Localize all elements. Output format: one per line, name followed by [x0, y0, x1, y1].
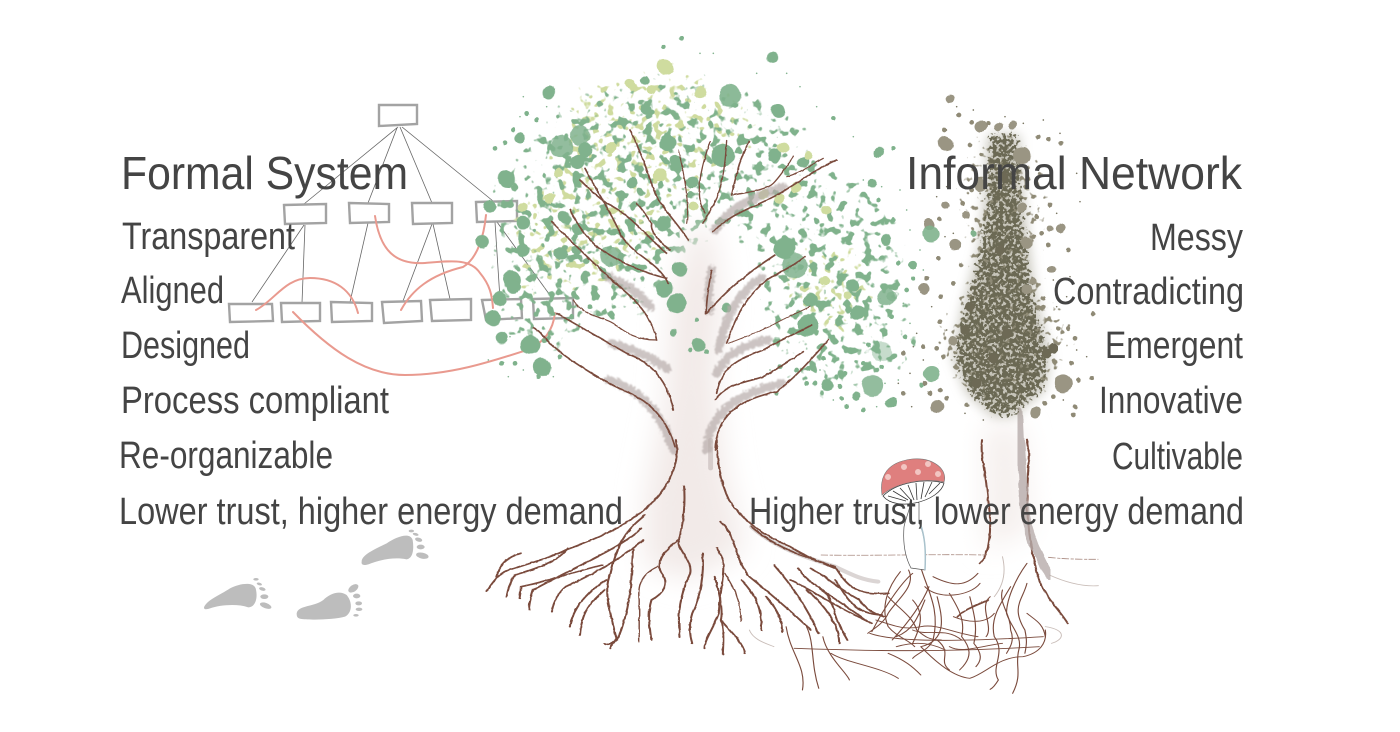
- text: aligned: Aligned: [121, 270, 224, 312]
- thick roots: [486, 440, 1068, 655]
- text: designed: Designed: [121, 325, 250, 367]
- heading: formal system: Formal System: [121, 147, 408, 199]
- text: cultivable: Cultivable: [1112, 436, 1243, 478]
- text: contradicting: Contradicting: [1053, 271, 1244, 313]
- canopy light green blobs: [519, 59, 851, 300]
- canopy core wash: [953, 135, 1050, 416]
- root grey shadows: [711, 440, 878, 582]
- text: messy: Messy: [1150, 217, 1243, 259]
- tree canopy and branches: [475, 38, 923, 450]
- footprint upper right: [362, 530, 429, 565]
- text: emergent: Emergent: [1105, 325, 1243, 367]
- right column: informal network: [749, 147, 1244, 533]
- canopy outlying splatter: [495, 38, 922, 410]
- small tree canopy: [886, 95, 1093, 420]
- canopy green large blobs: [475, 51, 894, 408]
- text: higher trust, lower energy demand: Higher trust, lower energy demand: [749, 491, 1244, 533]
- pale root trail: [749, 557, 1098, 647]
- text: innovative: Innovative: [1099, 380, 1243, 422]
- mushroom cap: [881, 459, 945, 495]
- canopy green noise splatter: [472, 60, 935, 415]
- text: transparent: Transparent: [122, 216, 295, 258]
- ground line right: [1048, 557, 1098, 559]
- canopy core noise speckle: [950, 130, 1052, 420]
- tree roots: [486, 440, 1098, 693]
- canopy green overlap blobs: [886, 225, 977, 407]
- canopy dark patches: [965, 177, 1053, 383]
- mushroom: [881, 459, 945, 570]
- tree: formal system tree: [472, 38, 1098, 693]
- text: re-organizable: Re-organizable: [119, 435, 333, 477]
- mushroom stem shadow: [919, 520, 925, 570]
- informal red links: [256, 215, 555, 375]
- tree grey bark shadows: [608, 187, 783, 450]
- canopy outer noise splatter: [920, 110, 1090, 415]
- text: process compliant: Process compliant: [121, 380, 389, 422]
- hierarchy boxes: [229, 105, 573, 323]
- canopy pale blobs: [918, 95, 1072, 417]
- mushroom stem: [904, 497, 925, 570]
- tree branches: [533, 130, 837, 450]
- heading: informal network: Informal Network: [906, 147, 1243, 199]
- small tree trunk wash: [985, 425, 1030, 550]
- org chart: formal hierarchy: [229, 105, 573, 375]
- thin roots and network mesh: [786, 560, 1046, 693]
- ground line left: [821, 554, 986, 556]
- mushroom gills: [883, 481, 944, 504]
- footprint lower left: [204, 578, 272, 610]
- footprints: [204, 530, 429, 620]
- canopy light green noise splatter: [490, 50, 900, 360]
- canopy mid grey splatter: [903, 115, 1093, 415]
- left column: formal system: [119, 147, 623, 533]
- small tree bark shadow: [1019, 412, 1049, 575]
- mushroom cap spots: [888, 464, 938, 477]
- tree: informal network tree: [886, 95, 1093, 575]
- hierarchy connector lines: [252, 127, 552, 303]
- canopy tiny specks: [898, 107, 1088, 420]
- text: lower trust, higher energy demand: Lower trust, higher energy demand: [119, 491, 623, 533]
- tree trunk wash: [645, 228, 745, 580]
- footprint lower middle: [297, 582, 362, 620]
